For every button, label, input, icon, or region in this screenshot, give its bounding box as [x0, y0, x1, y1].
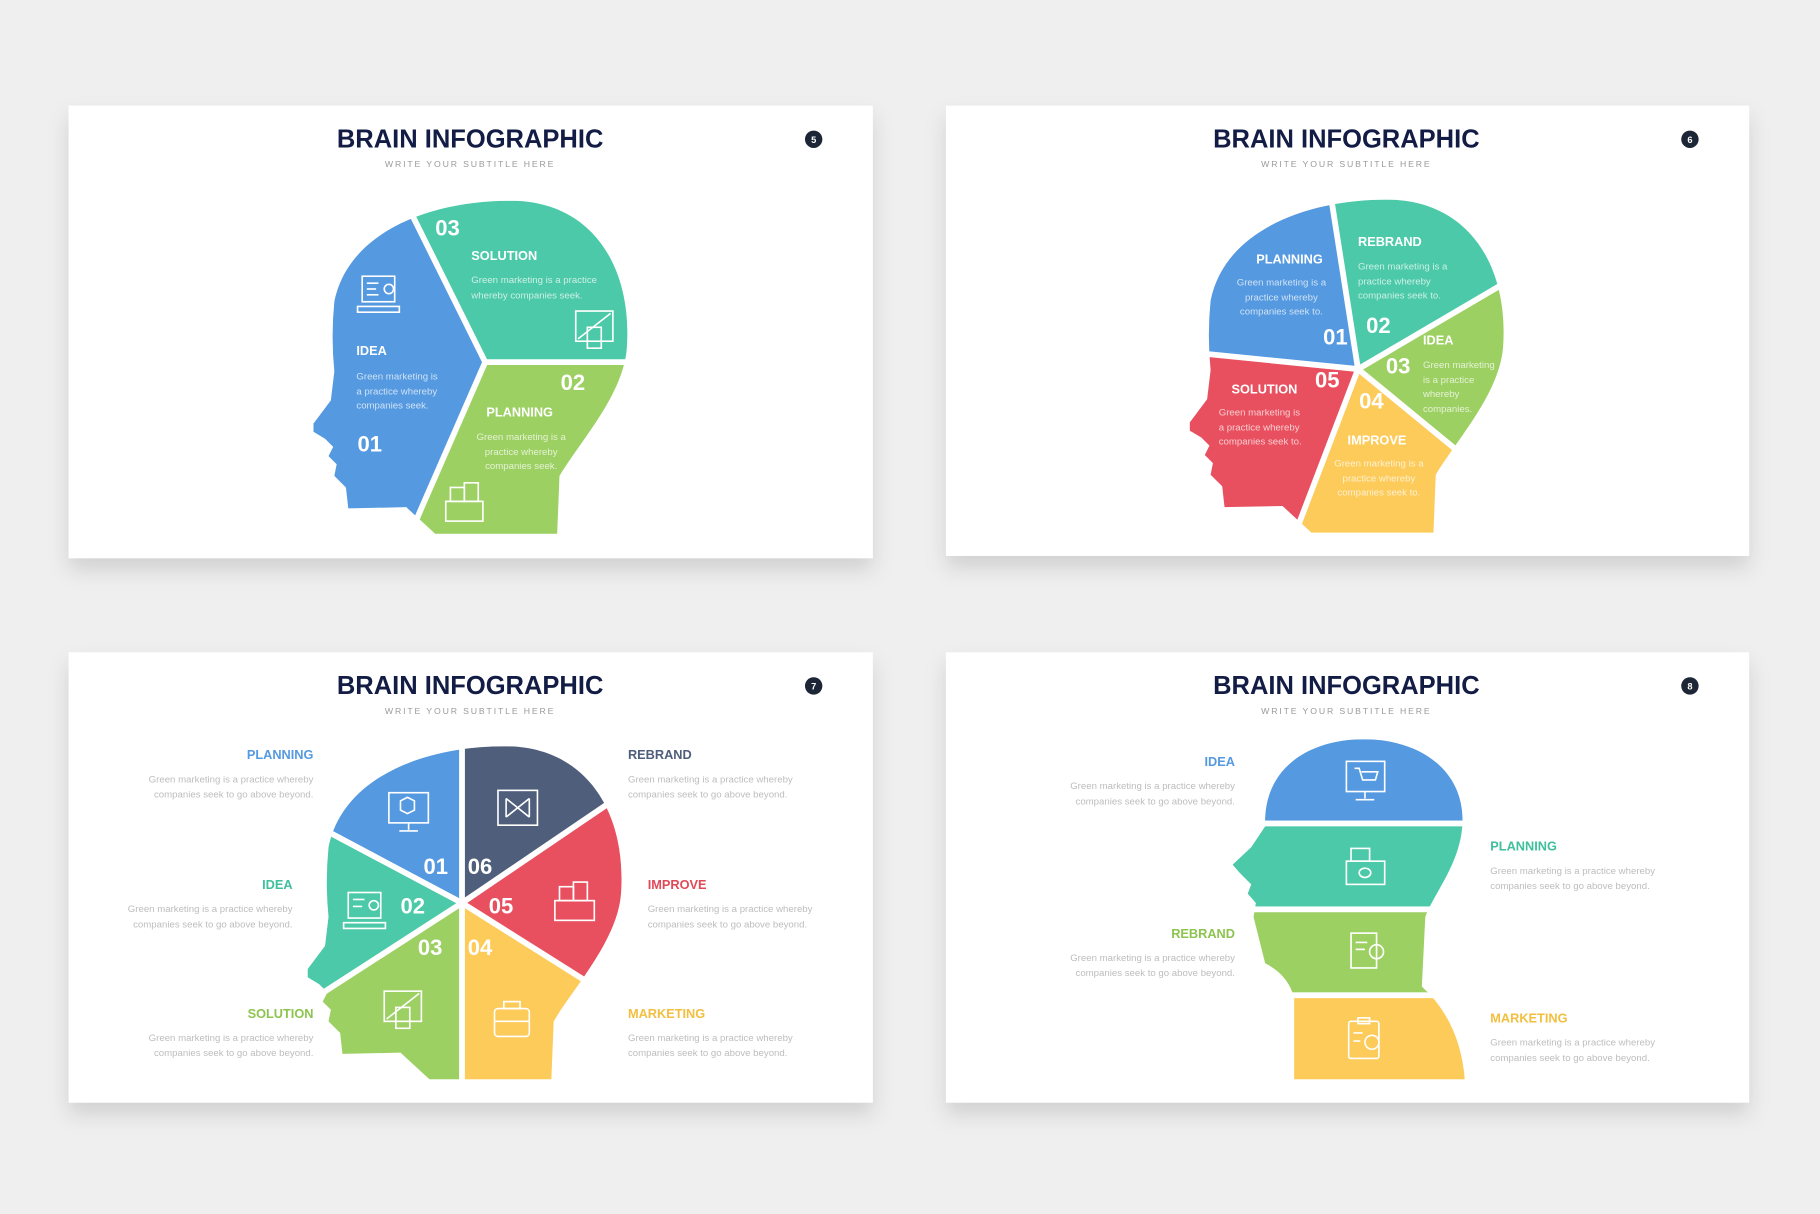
- label: rebrand: Green marketing is a practice whereby: [628, 774, 793, 785]
- segment 03 idea: 03: [1386, 354, 1410, 379]
- segment 04 improve: IMPROVE: [1348, 433, 1406, 448]
- label: idea 4: Green marketing is a practice whereby: [1070, 781, 1235, 792]
- icon: monitor cube: [389, 793, 428, 831]
- segment 01 idea: [356, 343, 438, 456]
- segment 05 solution: companies seek to.: [1219, 437, 1302, 448]
- label: solution: companies seek to go above beyond.: [154, 1048, 313, 1059]
- label: idea: Green marketing is a practice whereby: [128, 904, 293, 915]
- subtitle 3: WRITE YOUR SUBTITLE HERE: [385, 706, 555, 716]
- segment 02 rebrand: Green marketing is a: [1358, 261, 1448, 272]
- page badge 6: [1681, 131, 1699, 148]
- segment 05 solution: SOLUTION: [1231, 381, 1297, 396]
- segment 03 solution: Green marketing is a practice: [471, 275, 597, 286]
- label: marketing: MARKETING: [628, 1006, 705, 1021]
- label: marketing 4: Green marketing is a practice whereby: [1490, 1038, 1655, 1049]
- segment 01 planning: practice whereby: [1245, 293, 1318, 304]
- label: planning: PLANNING: [247, 747, 314, 762]
- label: improve: companies seek to go above beyond.: [648, 919, 807, 930]
- label: rebrand 4: REBRAND: [1171, 926, 1235, 941]
- segment 01 idea: Green marketing is: [356, 372, 438, 383]
- segment 01 planning: PLANNING: [1256, 251, 1323, 266]
- panel 3: six-part head: [69, 652, 873, 1103]
- segment 02 planning: practice whereby: [485, 447, 558, 458]
- panel 1: three-part head: [69, 106, 873, 558]
- label: marketing: companies seek to go above beyond.: [628, 1048, 787, 1059]
- page badge 5: [805, 131, 822, 148]
- page badge 6: 6: [1687, 135, 1693, 145]
- icon: suitcase: [495, 1002, 529, 1036]
- label: idea: companies seek to go above beyond.: [133, 919, 293, 930]
- page badge 8: [1681, 677, 1699, 695]
- title 3: BRAIN INFOGRAPHIC: [337, 672, 603, 700]
- segment 02 planning: Green marketing is a: [477, 432, 567, 443]
- icon: devices 2: [384, 991, 421, 1028]
- segment 04 improve: 04: [1359, 389, 1384, 414]
- numbers 01-06: 03: [418, 935, 442, 960]
- title 1: BRAIN INFOGRAPHIC: [337, 125, 603, 153]
- numbers 01-06: 01: [424, 854, 448, 879]
- label: idea 4: [1070, 754, 1235, 807]
- page badge 7: 7: [811, 681, 816, 691]
- head chart 4: [1232, 739, 1465, 1080]
- icon: document dollar: [1351, 933, 1384, 968]
- label: idea 4: IDEA: [1205, 754, 1235, 769]
- segment 04 improve: Green marketing is a: [1334, 459, 1424, 470]
- label: solution: Green marketing is a practice whereby: [149, 1033, 314, 1044]
- label: improve: [648, 877, 813, 930]
- label: planning 4: companies seek to go above beyond.: [1490, 881, 1650, 892]
- label: idea: IDEA: [262, 877, 293, 892]
- segment 02 rebrand: 02: [1366, 313, 1391, 338]
- subtitle 4: WRITE YOUR SUBTITLE HERE: [1261, 706, 1432, 716]
- segment 02 rebrand: practice whereby: [1358, 276, 1431, 287]
- label: planning 4: [1490, 839, 1655, 892]
- label: planning: [149, 747, 314, 800]
- icon: boxes: [446, 483, 483, 521]
- label: rebrand: REBRAND: [628, 747, 692, 762]
- numbers 01-06: 02: [400, 893, 425, 918]
- segment 05 solution: a practice whereby: [1219, 423, 1300, 434]
- segment 01 planning: [1237, 251, 1348, 350]
- segment 02 rebrand: [1358, 234, 1448, 338]
- segment 05 solution: 05: [1315, 368, 1340, 393]
- segment 03 idea: IDEA: [1423, 333, 1453, 348]
- icon: devices: [576, 311, 613, 348]
- head chart 2: [1190, 200, 1504, 533]
- label: planning 4: PLANNING: [1490, 839, 1557, 854]
- segment 01 planning: companies seek to.: [1240, 307, 1323, 318]
- icon: blueprint: [498, 790, 537, 825]
- segment 02 planning: companies seek.: [485, 461, 557, 472]
- icon: clipboard star: [1349, 1018, 1379, 1058]
- subtitle 2: WRITE YOUR SUBTITLE HERE: [1261, 159, 1432, 169]
- segment 01 planning: 01: [1323, 325, 1348, 350]
- segment 03 idea: companies.: [1423, 404, 1472, 415]
- segment 01 idea: companies seek.: [356, 401, 429, 412]
- segment 03 solution: [435, 216, 597, 301]
- page badge 8: 8: [1687, 681, 1693, 691]
- subtitle 1: WRITE YOUR SUBTITLE HERE: [385, 159, 555, 169]
- segment 01 idea: IDEA: [356, 343, 387, 358]
- page badge 7: [805, 677, 822, 695]
- label: marketing: [628, 1006, 793, 1059]
- label: planning: companies seek to go above beyond.: [154, 789, 313, 800]
- segment 02 planning: 02: [561, 370, 585, 395]
- label: rebrand 4: companies seek to go above beyond.: [1076, 968, 1235, 979]
- label: idea: [128, 877, 293, 930]
- segment 02 planning: [477, 370, 585, 472]
- icon: laptop gear 2: [344, 893, 385, 928]
- label: rebrand: [628, 747, 793, 800]
- segment 03 solution: SOLUTION: [471, 248, 537, 263]
- icon: laptop gear: [358, 276, 399, 312]
- segment 04 improve: [1334, 389, 1424, 499]
- icon: boxes 2: [555, 882, 594, 920]
- page badge 5: 5: [811, 135, 816, 145]
- head chart 3: [308, 746, 622, 1080]
- numbers 01-06: 05: [489, 893, 513, 918]
- segment 02 rebrand: companies seek to.: [1358, 290, 1441, 301]
- segment 04 improve: practice whereby: [1343, 474, 1415, 485]
- label: solution: [149, 1006, 314, 1059]
- segment 02 rebrand: REBRAND: [1358, 234, 1422, 249]
- segment 03 idea: is a practice: [1423, 375, 1474, 386]
- segment 03 idea: [1386, 333, 1495, 415]
- numbers 01-06: [400, 854, 513, 960]
- segment 05 solution: [1219, 368, 1340, 448]
- segment 02 planning: PLANNING: [486, 405, 553, 420]
- icon: cart monitor: [1346, 761, 1385, 800]
- head chart 1: [314, 200, 628, 534]
- segment 01 planning: Green marketing is a: [1237, 278, 1327, 289]
- segment 01 idea: 01: [358, 431, 382, 456]
- panel 4: stacked head: [946, 652, 1749, 1103]
- title 4: BRAIN INFOGRAPHIC: [1213, 672, 1480, 700]
- numbers 01-06: 06: [468, 854, 492, 879]
- segment 04 improve: companies seek to.: [1337, 488, 1420, 499]
- label: rebrand 4: Green marketing is a practice whereby: [1070, 953, 1235, 964]
- segment 03 solution: 03: [435, 216, 460, 241]
- label: idea 4: companies seek to go above beyond.: [1076, 796, 1235, 807]
- segment 05 solution: Green marketing is: [1219, 407, 1300, 418]
- label: planning: Green marketing is a practice whereby: [149, 774, 314, 785]
- label: improve: IMPROVE: [648, 877, 707, 892]
- label: solution: SOLUTION: [248, 1006, 313, 1021]
- numbers 01-06: 04: [468, 935, 493, 960]
- title 2: BRAIN INFOGRAPHIC: [1213, 125, 1480, 153]
- label: marketing: Green marketing is a practice whereby: [628, 1033, 793, 1044]
- segment 03 idea: whereby: [1422, 389, 1460, 400]
- label: rebrand: companies seek to go above beyond.: [628, 789, 787, 800]
- icon: money: [1346, 848, 1385, 884]
- label: marketing 4: companies seek to go above beyond.: [1490, 1053, 1650, 1064]
- label: improve: Green marketing is a practice whereby: [648, 904, 813, 915]
- label: marketing 4: MARKETING: [1490, 1010, 1568, 1025]
- label: planning 4: Green marketing is a practice whereby: [1490, 866, 1655, 877]
- label: rebrand 4: [1070, 926, 1235, 979]
- segment 03 solution: whereby companies seek.: [470, 290, 583, 301]
- segment 03 idea: Green marketing: [1423, 360, 1495, 371]
- segment 01 idea: a practice whereby: [356, 387, 437, 398]
- panel 2: five-part head: [946, 106, 1749, 556]
- label: marketing 4: [1490, 1010, 1655, 1064]
